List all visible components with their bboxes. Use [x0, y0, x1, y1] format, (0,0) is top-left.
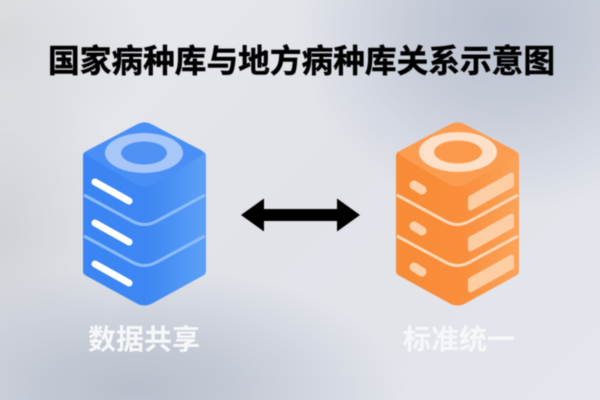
- label: unified standards: 标准统一: [403, 324, 515, 355]
- label: data sharing: 数据共享: [88, 324, 200, 355]
- title: 国家病种库与地方病种库关系示意图: [48, 43, 555, 79]
- blue top face: [89, 126, 200, 184]
- blue database stack: [84, 126, 205, 300]
- double-headed arrow: [241, 198, 360, 232]
- orange database stack: [397, 126, 518, 300]
- blue ring: [105, 133, 183, 173]
- orange top face: [402, 126, 513, 184]
- orange indicator pills: [414, 185, 422, 272]
- blue indicator bars: [95, 182, 129, 283]
- blue stack body: [88, 128, 201, 300]
- orange status panels: [470, 175, 512, 290]
- orange tier separators: [397, 195, 518, 266]
- blue tier separators: [84, 195, 205, 266]
- orange stack body: [401, 128, 514, 300]
- orange ring: [419, 132, 497, 172]
